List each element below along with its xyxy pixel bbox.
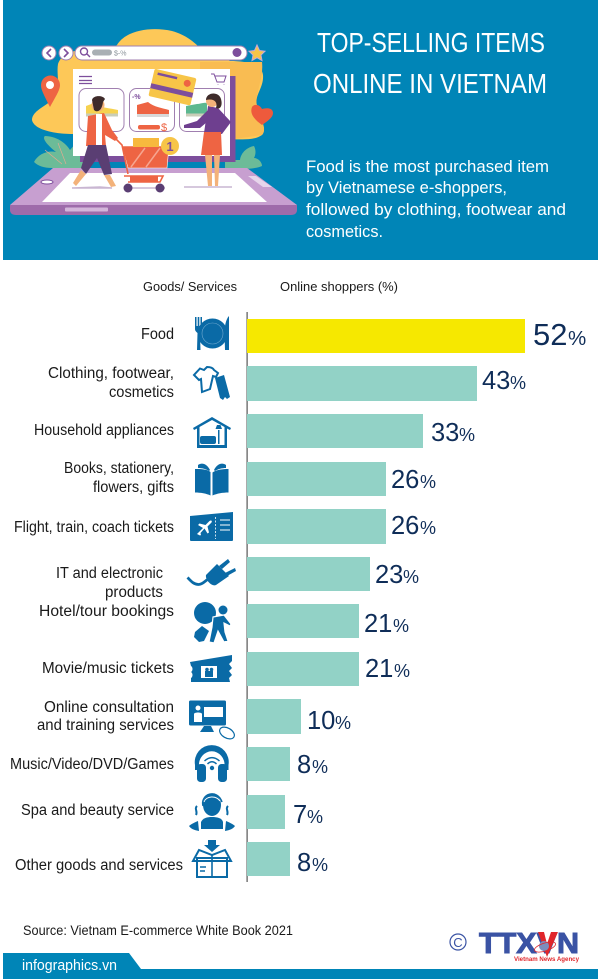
icon: food [195,316,229,350]
bar value labels: % [307,807,323,827]
category labels: Food [141,326,174,343]
logo: TTXVN: TTXVN [479,928,579,960]
column headings [143,279,398,294]
category labels: Hotel/tour bookings [39,603,174,620]
title: TOP-SELLING ITEMS [317,27,545,58]
bar value labels: % [420,472,436,492]
source note: Source: Vietnam E-commerce White Book 2021 [23,922,293,938]
browser window [73,69,236,162]
category labels: and training services [37,717,174,734]
column headings: Goods/ Services [143,279,237,294]
footer band [3,953,598,979]
bar value labels: 21 [365,655,393,683]
icon: online training [189,700,236,741]
bar value labels: % [459,425,475,445]
category labels: flowers, gifts [93,479,174,496]
credit card [148,69,197,106]
browser window: -% [132,94,141,101]
icon: location pin [41,76,60,107]
search bar [42,46,247,60]
header panel [3,0,598,260]
category labels: Movie/music tickets [42,660,174,677]
shoes [86,103,118,116]
bar value labels: 26 [391,466,419,494]
category labels: Clothing, footwear, [48,365,174,382]
bar value labels: 10 [307,707,335,735]
icon: heart [251,105,273,125]
axis [246,312,248,882]
bar value labels: % [394,661,410,681]
title: ONLINE IN VIETNAM [313,68,547,99]
bar chart [246,312,525,882]
category icons [188,316,236,877]
plants [34,136,262,169]
illustration: online shopping [10,29,297,215]
tablet [10,168,297,215]
bar value labels: 21 [364,610,392,638]
bar value labels: % [312,855,328,875]
icon: book [195,464,228,496]
logo: TTXVN: C [453,935,463,950]
icon: travel [194,602,231,643]
icon: cinema ticket [190,655,232,682]
category labels: Flight, train, coach tickets [14,519,174,536]
bar value labels: % [335,713,351,733]
footer band: infographics.vn [22,957,117,974]
bar value labels: 33 [431,419,459,447]
category labels: Online consultation [44,699,174,716]
intro text: Food is the most purchased item [306,157,549,176]
logo: TTXVN: Vietnam News Agency [514,957,580,963]
intro text: followed by clothing, footwear and [306,200,566,219]
category labels: Music/Video/DVD/Games [10,756,174,773]
intro text: by Vietnamese e-shoppers, [306,178,507,197]
title [313,27,547,99]
bar value labels: % [568,327,586,350]
logo: TTXVN [450,928,580,963]
category labels: cosmetics [109,384,174,401]
icon: clothing [194,367,230,400]
woman [184,93,231,186]
category labels: products [105,584,163,601]
search bar: $-% [114,50,126,58]
bar value labels: 23 [375,561,403,589]
icon: plug [188,559,236,585]
icon: box [193,840,231,877]
bar value labels: 43 [482,367,510,395]
column headings: Online shoppers (%) [280,279,398,294]
browser window: $ [161,122,167,134]
bar value labels: % [312,757,328,777]
icon: household [193,417,231,448]
bar value labels [293,317,586,877]
bar value labels: % [510,373,526,393]
intro text: cosmetics. [306,222,383,241]
intro text [306,157,566,241]
category labels: Household appliances [34,422,174,439]
shopping cart: 1 [166,139,174,154]
bar value labels: % [393,616,409,636]
bar value labels: 8 [297,751,311,779]
bar value labels: % [420,518,436,538]
category labels: Spa and beauty service [21,802,174,819]
bar value labels: % [403,567,419,587]
man [73,96,118,187]
icon: spa [189,794,235,831]
yellow blob [32,29,264,140]
category labels: Books, stationery, [64,460,174,477]
shopping cart [112,135,179,192]
category labels [10,326,183,874]
bar value labels: 52 [533,317,567,352]
icon: star [249,45,265,60]
bar value labels: 8 [297,849,311,877]
icon: ticket [190,512,233,541]
bar value labels: 7 [293,801,307,829]
bar value labels: 26 [391,512,419,540]
category labels: IT and electronic [56,565,163,582]
icon: headphones [195,745,229,782]
category labels: Other goods and services [15,857,183,874]
